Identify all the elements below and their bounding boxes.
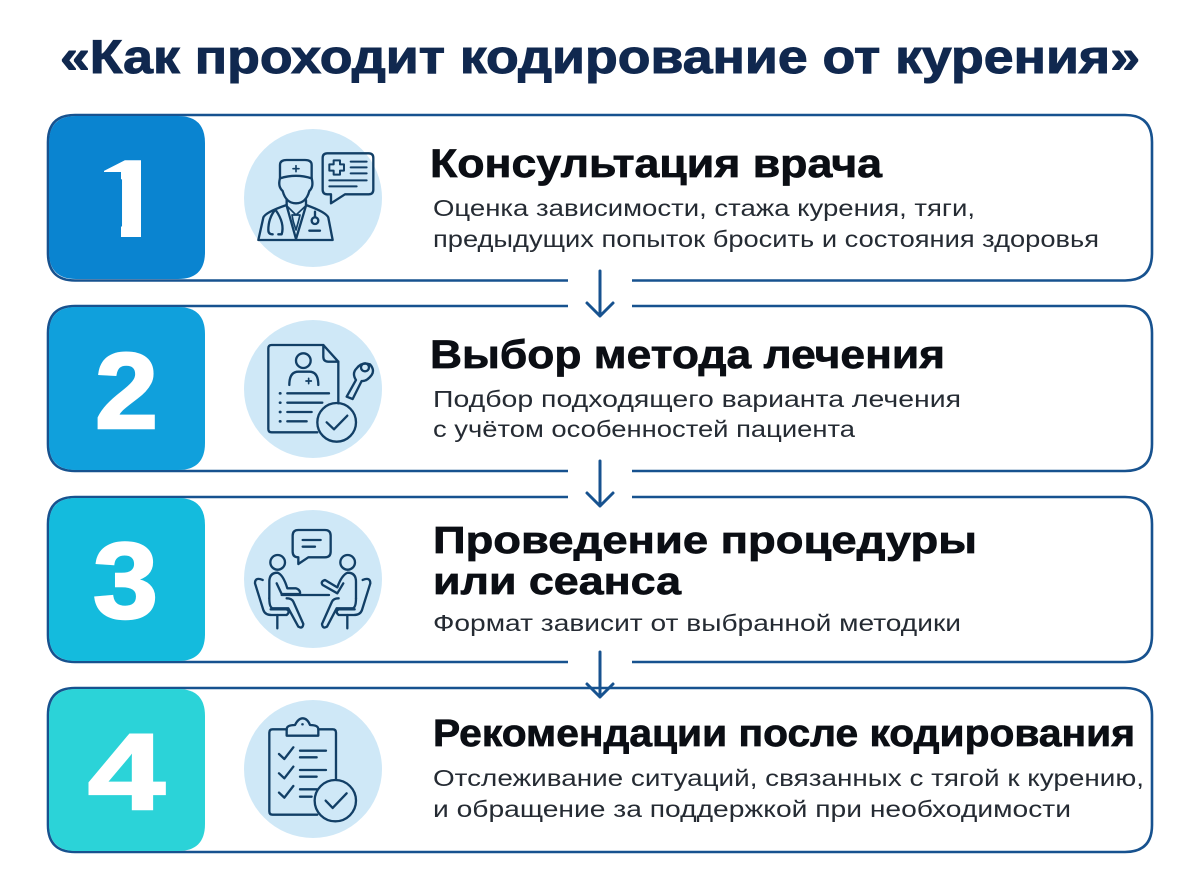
heading 2: Выбор метода лечения <box>430 333 945 377</box>
panel: step 2 <box>48 306 1152 471</box>
number tile 2: 2 <box>95 330 158 451</box>
description 3: Формат зависит от выбранной методики <box>433 610 961 636</box>
number tile 3 <box>49 498 205 661</box>
description 1: предыдущих попыток бросить и состояния здоровья <box>433 226 1099 252</box>
panel: step 1 <box>48 115 1152 280</box>
description 4: и обращение за поддержкой при необходимости <box>433 796 1071 822</box>
card outline 1 <box>48 115 1152 280</box>
heading 4: Рекомендации после кодирования <box>433 713 1135 755</box>
card outline 2 <box>48 306 1152 471</box>
arrow 3 <box>587 652 613 697</box>
heading 3: Проведение процедуры <box>433 520 977 562</box>
description 4: Отслеживание ситуаций, связанных с тягой к курению, <box>433 765 1144 791</box>
arrow 2 <box>587 461 613 506</box>
icon: conversation <box>244 510 382 648</box>
panel: step 3 <box>48 497 1152 662</box>
number tile 3: 3 <box>93 520 158 641</box>
panel: step 4 <box>48 688 1152 852</box>
description 1: Оценка зависимости, стажа курения, тяги, <box>433 195 975 221</box>
description 2: с учётом особенностей пациента <box>433 416 856 442</box>
heading 1: Консультация врача <box>430 142 883 186</box>
icon: checklist <box>244 700 382 838</box>
number tile 1: 1 <box>91 138 171 264</box>
heading 3: или сеанса <box>433 561 682 603</box>
title: «Как проходит кодирование от курения» <box>60 30 1140 83</box>
card outline 3 <box>48 497 1152 662</box>
number tile 4: 4 <box>88 711 165 832</box>
icon: doctor <box>244 129 382 267</box>
number tile 2 <box>49 307 205 470</box>
description 2: Подбор подходящего варианта лечения <box>433 386 961 412</box>
number tile 1 <box>49 116 205 279</box>
arrow 1 <box>587 271 613 316</box>
number tile 4 <box>49 689 205 851</box>
icon: patient document <box>244 320 382 458</box>
card outline 4 <box>48 688 1152 852</box>
